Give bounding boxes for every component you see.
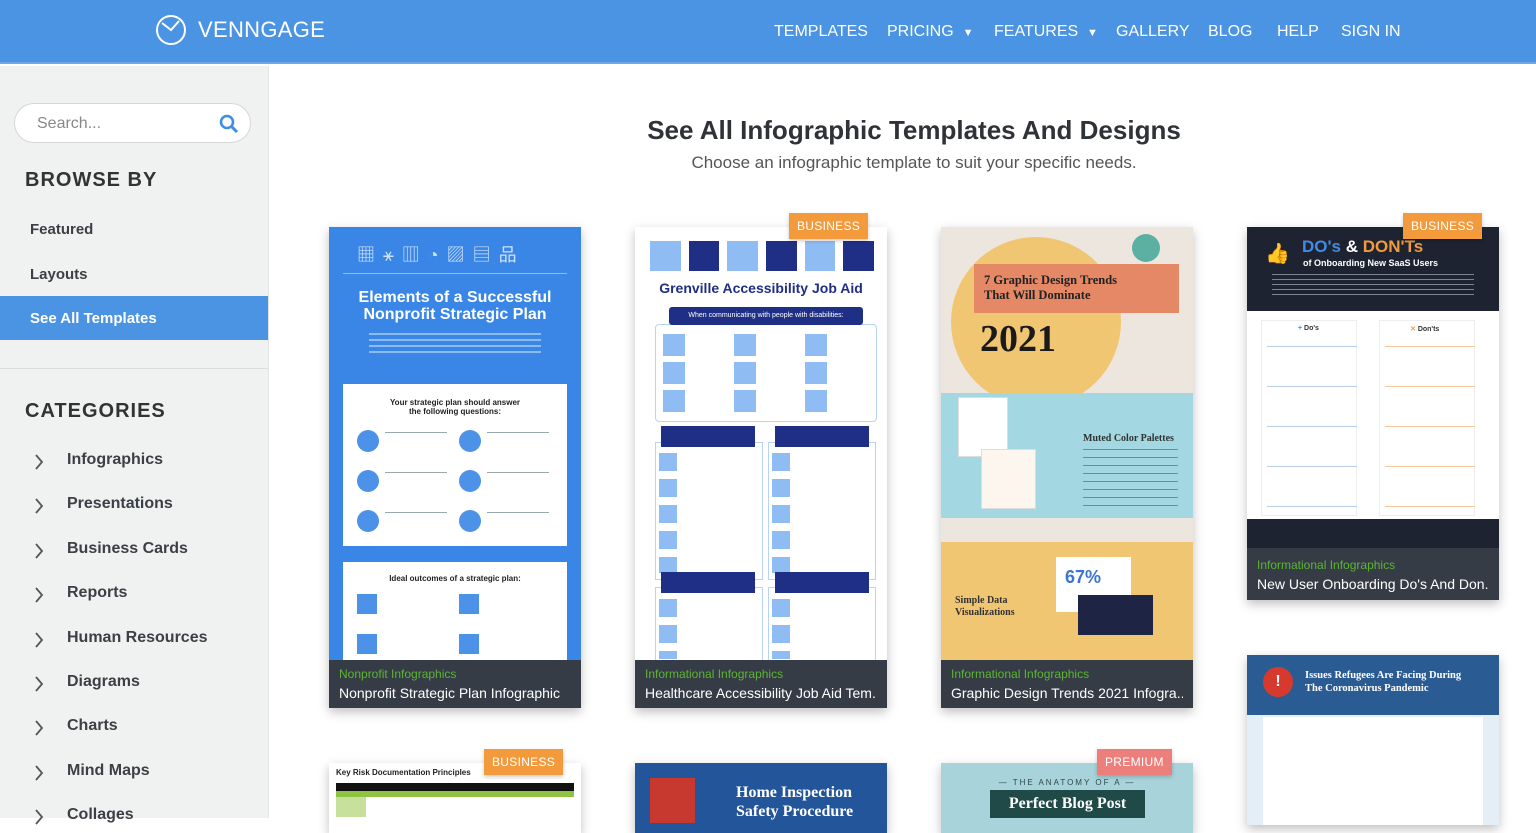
card: accessibility job aid: Informational Infographics [645,667,783,681]
badge: business [789,213,868,239]
category list: Business Cards [67,540,188,557]
active item: See All Templates [30,310,157,327]
card: home inspection: Home Inspection [736,784,852,801]
category list [35,451,208,825]
card: graphic design trends: Visualizations [955,607,1015,618]
navigation: PRICING ▼ [887,23,973,40]
card: accessibility job aid: Grenville Accessibility Job Aid [659,280,863,296]
card: nonprofit strategic plan: Ideal outcomes of a strategic plan: [389,574,521,583]
card: key risk documentation [329,763,581,833]
card: accessibility job aid: When communicating with people with disabilities: [688,312,844,319]
card: dos and donts [1247,227,1499,600]
navigation: FEATURES ▼ [994,23,1098,40]
card: graphic design trends: Graphic Design Trends 2021 Infogra... [951,685,1183,701]
subtitle: Choose an infographic template to suit your specific needs. [691,153,1137,172]
card: refugees [1247,655,1499,825]
card: home inspection [635,763,887,833]
navigation: TEMPLATES [774,23,868,40]
heading: browse by: BROWSE BY [25,169,157,191]
badge: business: BUSINESS [492,755,555,769]
card: dos and donts: Informational Infographics [1257,558,1395,572]
navigation: GALLERY [1116,23,1190,40]
navigation [774,23,1401,40]
card: dos and donts: 👍 [1265,243,1290,265]
card: refugees: ! [1275,673,1281,690]
category list: Charts [67,717,118,734]
card: key risk documentation: Key Risk Documentation Principles [336,768,471,777]
category list: Collages [67,806,134,823]
card: graphic design trends [941,227,1193,708]
search box [14,103,251,143]
icon: logo circle [156,15,186,45]
category list: Reports [67,584,127,601]
card: graphic design trends: 67% [1065,567,1101,587]
badge: business: BUSINESS [1411,219,1474,233]
card: dos and donts: ✕ Don'ts [1410,326,1439,333]
icon: search [220,114,238,133]
active item [0,296,268,340]
header bar [0,0,1536,64]
card: nonprofit strategic plan: ▦⚹▥◔▨▤品 [357,245,525,265]
card: blog post [941,763,1193,833]
category list: Presentations [67,495,173,512]
card: graphic design trends: Muted Color Palettes [1083,433,1174,444]
sidebar [0,66,269,818]
card: dos and donts: of Onboarding New SaaS Users [1303,258,1438,268]
card: blog post: Perfect Blog Post [1009,795,1126,812]
card: graphic design trends: 7 Graphic Design Trends [984,273,1117,287]
card: blog post: — THE ANATOMY OF A — [999,778,1135,787]
badge: premium [1097,749,1172,775]
card: accessibility job aid: Healthcare Accessibility Job Aid Tem... [645,685,877,701]
card: nonprofit strategic plan: Elements of a Successful [359,289,551,306]
page title: See All Infographic Templates And Designs [647,115,1181,145]
card: dos and donts: DO's & DON'Ts [1302,237,1423,256]
sidebar: Layouts [30,266,88,283]
navigation: BLOG [1208,23,1252,40]
heading: categories: CATEGORIES [25,400,166,422]
card: nonprofit strategic plan: the following questions: [409,407,501,416]
card: nonprofit strategic plan [329,227,581,708]
category list: Mind Maps [67,762,150,779]
category list: Human Resources [67,629,208,646]
badge: premium: PREMIUM [1105,755,1164,769]
logo [156,15,325,45]
card: dos and donts: + Do's [1298,325,1319,332]
card: accessibility job aid [635,227,887,708]
card: home inspection: Safety Procedure [736,803,853,820]
card: nonprofit strategic plan: Nonprofit Strategic Plan [363,306,547,323]
card: graphic design trends: Simple Data [955,595,1008,606]
navigation: SIGN IN [1341,23,1401,40]
card: refugees: The Coronavirus Pandemic [1305,683,1428,694]
badge: business [484,749,563,775]
navigation: HELP [1277,23,1319,40]
card: nonprofit strategic plan: Nonprofit Infographics [339,667,456,681]
card: nonprofit strategic plan: Your strategic plan should answer [390,398,520,407]
card: nonprofit strategic plan: Nonprofit Strategic Plan Infographic [339,685,560,701]
card: refugees: Issues Refugees Are Facing During [1305,670,1461,681]
card: graphic design trends: Informational Infographics [951,667,1089,681]
card: graphic design trends: That Will Dominate [984,288,1090,302]
card: graphic design trends: 2021 [980,318,1056,360]
badge: business: BUSINESS [797,219,860,233]
sidebar: Featured [30,221,93,238]
logo: VENNGAGE [198,17,325,42]
category list: Infographics [67,451,163,468]
category list: Diagrams [67,673,140,690]
search box: Search... [37,115,101,132]
badge: business [1403,213,1482,239]
